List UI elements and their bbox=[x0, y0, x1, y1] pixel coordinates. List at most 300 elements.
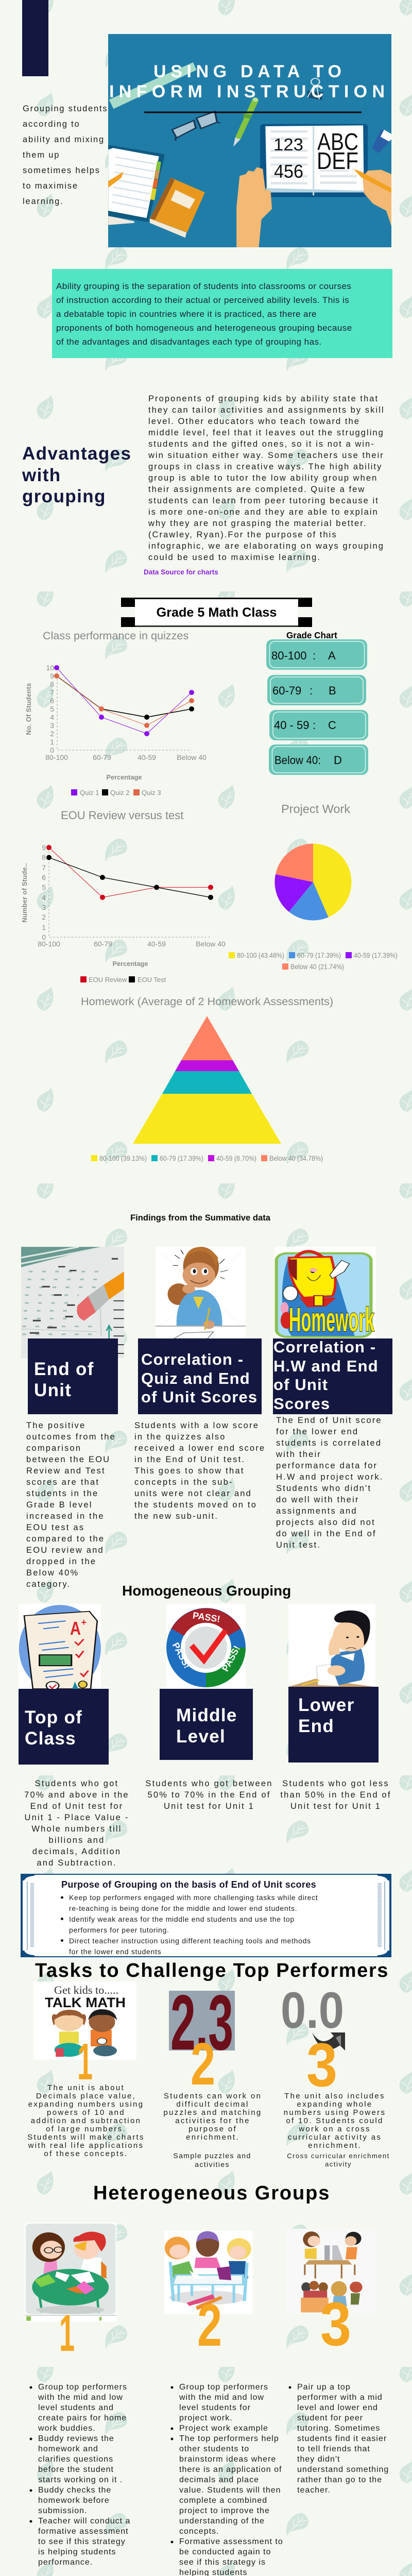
advantages paragraph: is more one-on-one and they are able to explain bbox=[148, 507, 379, 517]
finding text: End of Unit: dropped in the bbox=[26, 1557, 96, 1566]
level text: top of class bbox=[24, 1779, 129, 1868]
advantages paragraph: why they are not grasping the material better. bbox=[148, 519, 367, 528]
grade chart: Below 40: bbox=[274, 754, 321, 767]
strategy list 3: performer with a mid bbox=[297, 2393, 383, 2402]
bullet dots bbox=[61, 1896, 63, 1942]
grade chart: A bbox=[328, 649, 336, 662]
purpose heading: Purpose of Grouping on the basis of End of Unit scores bbox=[61, 1879, 316, 1890]
level box: Top of Class: Class bbox=[25, 1728, 76, 1749]
strategy list 2: project to improve the bbox=[179, 2506, 270, 2515]
image: pass badge: PASS! bbox=[170, 1641, 193, 1670]
line chart: EOU review versus test: 7 bbox=[42, 863, 46, 872]
strategy list 3: level and lower end bbox=[297, 2403, 378, 2412]
strategy list 3: tutoring. Sometimes bbox=[297, 2424, 380, 2433]
advantages paragraph bbox=[148, 394, 385, 562]
finding text: homework correlation: H.W and project work. bbox=[276, 1472, 384, 1482]
advantages paragraph: Proponents of grouping kids by ability state that bbox=[148, 394, 379, 403]
data source link: Data Source for charts bbox=[144, 568, 218, 576]
strategy list 2: brainstorm ideas where bbox=[179, 2455, 276, 2464]
level text: middle level: 50% to 70% in the End of bbox=[147, 1790, 271, 1800]
line chart: EOU review versus test: 5 bbox=[42, 883, 46, 891]
line chart: class performance in quizzes: No. Of Students bbox=[25, 683, 32, 735]
line chart: class performance in quizzes: Below 40 bbox=[177, 753, 207, 761]
line chart: class performance in quizzes: 8 bbox=[50, 680, 54, 688]
finding text: homework correlation: assignments and bbox=[276, 1506, 357, 1516]
strategy list 3: they didn't bbox=[297, 2455, 340, 2464]
task link 3 bbox=[287, 2152, 390, 2168]
line chart: class performance in quizzes: 7 bbox=[50, 688, 54, 697]
title box: End of Unit: Unit bbox=[34, 1380, 72, 1400]
task text 1: Students will make charts bbox=[27, 2133, 145, 2142]
level text: top of class: Whole numbers till bbox=[31, 1824, 122, 1834]
legend bbox=[91, 1155, 323, 1162]
image: pair at green table bbox=[25, 2223, 116, 2322]
task text 3: of 10. Students could bbox=[286, 2116, 384, 2125]
line chart: class performance in quizzes: 9 bbox=[50, 672, 54, 680]
finding text: End of Unit: compared to the bbox=[26, 1534, 105, 1544]
purpose bullets bbox=[69, 1893, 318, 1956]
image: talk math kids: TALK MATH bbox=[45, 1995, 126, 2010]
grade chart: 80-100 bbox=[271, 649, 307, 662]
purpose bullets: performers for peer tutoring. bbox=[69, 1926, 169, 1934]
purpose bullets: Identify weak areas for the middle end students and use the top bbox=[69, 1914, 295, 1923]
task text 2 bbox=[163, 2092, 262, 2142]
finding text: End of Unit: comparison bbox=[26, 1444, 81, 1453]
legend: EOU Review bbox=[89, 976, 127, 984]
legend: 60-79 (17.39%) bbox=[297, 952, 341, 959]
line chart: class performance in quizzes: 5 bbox=[50, 705, 54, 713]
task text 3 bbox=[284, 2092, 386, 2150]
grade chart: C bbox=[328, 719, 336, 732]
list 1 bullets bbox=[29, 2385, 33, 2524]
strategy list 1: homework and bbox=[38, 2445, 98, 2453]
series: quiz 1 bbox=[54, 665, 194, 736]
grade chart: D bbox=[334, 754, 342, 767]
level text: top of class: and Subtraction. bbox=[37, 1858, 117, 1868]
finding text: End of Unit: increased in the bbox=[26, 1512, 105, 1521]
heading: advantages with grouping: with bbox=[22, 465, 61, 485]
finding text: homework correlation: Students who didn't bbox=[276, 1484, 371, 1493]
image: pass badge bbox=[166, 1604, 246, 1689]
line chart: class performance in quizzes: 2 bbox=[50, 730, 54, 738]
task link 3: Cross curricular enrichment bbox=[287, 2152, 390, 2160]
image: confused man bbox=[288, 1604, 375, 1687]
title: INFORM INSTRUCTION bbox=[109, 82, 385, 101]
line chart: EOU review versus test: 1 bbox=[42, 923, 46, 931]
level text: top of class: Unit 1 - Place Value - bbox=[24, 1813, 129, 1822]
strategy list 1: to see if this strategy bbox=[38, 2537, 126, 2546]
line chart: EOU review versus test bbox=[21, 809, 226, 984]
strategy list 3: student for peer bbox=[297, 2414, 363, 2422]
level text: top of class: billions and bbox=[49, 1836, 105, 1845]
image: thinking girl bbox=[156, 1247, 246, 1338]
grade chart: B bbox=[329, 684, 336, 697]
title box: Correlation quiz bbox=[138, 1338, 262, 1414]
strategy list 1: Buddy checks the bbox=[38, 2486, 111, 2495]
banner: Grade 5 Math Class: Grade 5 Math Class bbox=[157, 605, 277, 620]
strategy list 3: understand something bbox=[297, 2465, 389, 2474]
intro text: to maximise bbox=[23, 181, 78, 191]
finding text: quiz correlation: in the End of Unit test. bbox=[134, 1455, 245, 1464]
grade chart: : bbox=[313, 649, 316, 662]
navy accent bar bbox=[22, 0, 48, 76]
strategy list 1: level students and bbox=[38, 2403, 114, 2412]
finding text: End of Unit: Below 40% bbox=[26, 1568, 79, 1578]
level text: lower end bbox=[280, 1779, 391, 1811]
finding text: quiz correlation: concepts in the sub- bbox=[134, 1478, 233, 1487]
line chart: EOU review versus test: 3 bbox=[42, 903, 46, 911]
level text: lower end: Students who got less bbox=[282, 1779, 389, 1788]
grade chart title: Grade Chart bbox=[286, 631, 337, 640]
task text 1: of large numbers. bbox=[46, 2125, 126, 2133]
strategy list 1: Teacher will conduct a bbox=[38, 2517, 130, 2526]
strategy list 2: Project work example bbox=[179, 2424, 268, 2433]
strategy list 2: understanding of the bbox=[179, 2517, 265, 2526]
line chart: class performance in quizzes: 4 bbox=[50, 713, 54, 721]
advantages paragraph: groups in class in creative ways. The high ability bbox=[148, 462, 382, 471]
chart title: EOU Review versus test bbox=[61, 809, 183, 822]
task text 2: Students can work on bbox=[164, 2092, 262, 2100]
series: quiz 2 bbox=[57, 676, 194, 720]
finding text: quiz correlation: received a lower end score bbox=[134, 1444, 265, 1453]
level box: Lower End: End bbox=[298, 1716, 334, 1736]
image: students at desks bbox=[286, 2229, 363, 2312]
strategy list 2: there is an application of bbox=[179, 2465, 282, 2474]
task text 1: addition and subtraction bbox=[31, 2116, 141, 2125]
image: pass badge: PASS! bbox=[220, 1644, 242, 1673]
title box: Correlation quiz: Correlation - bbox=[141, 1350, 244, 1368]
definition text: of the advantages and disadvantages each type of grouping has. bbox=[56, 337, 322, 346]
task text 1 bbox=[27, 2083, 145, 2158]
image: A+ test paper: A bbox=[70, 1618, 81, 1639]
finding text: End of Unit: EOU test as bbox=[26, 1523, 84, 1532]
task text 3: expanding whole bbox=[297, 2100, 373, 2109]
line chart: class performance in quizzes: 1 bbox=[50, 738, 54, 746]
legend: Quiz 1 bbox=[80, 789, 99, 796]
level text: middle level bbox=[145, 1779, 273, 1811]
intro text: them up bbox=[23, 150, 60, 160]
task text 1: powers of 10 and bbox=[47, 2108, 125, 2117]
purpose bullets: for the lower end students bbox=[69, 1947, 161, 1956]
pyramid chart: homework bbox=[81, 995, 333, 1162]
task text 3: The unit also includes bbox=[284, 2092, 385, 2100]
finding text: homework correlation bbox=[276, 1416, 384, 1550]
title box: Correlation homework: Correlation - bbox=[273, 1338, 376, 1356]
image: A+ test paper bbox=[19, 1604, 101, 1689]
legend: Below 40 (21.74%) bbox=[290, 963, 344, 971]
definition text: of instruction according to their actual or perceived ability levels. This is bbox=[56, 295, 349, 305]
finding text: homework correlation: do well in the End of bbox=[276, 1529, 376, 1538]
line chart: EOU review versus test: 40-59 bbox=[147, 940, 166, 948]
finding text: homework correlation: students is correlated bbox=[276, 1438, 382, 1448]
level box: Lower End bbox=[288, 1687, 379, 1762]
image: pass badge: PASS! bbox=[192, 1610, 221, 1624]
finding text: End of Unit bbox=[26, 1421, 116, 1589]
strategy list 3: rather than go to the bbox=[297, 2476, 382, 2484]
task text 1: expanding numbers using bbox=[28, 2100, 144, 2109]
title box: Correlation homework bbox=[273, 1338, 392, 1414]
title bbox=[109, 62, 385, 101]
chart title: Homework (Average of 2 Homework Assessments) bbox=[81, 995, 333, 1008]
finding text: quiz correlation: This goes to show that bbox=[134, 1466, 244, 1476]
definition text: a debatable topic in countries where it is practiced, as there are bbox=[56, 309, 317, 318]
task text 3: enrichment. bbox=[308, 2141, 362, 2150]
teal definition panel bbox=[52, 269, 392, 358]
purpose bullets: Keep top performers engaged with more challenging tasks while direct bbox=[69, 1893, 318, 1901]
finding text: homework correlation: projects also did not bbox=[276, 1518, 375, 1527]
legend bbox=[229, 952, 398, 971]
strategy list 2: Group top performers bbox=[179, 2383, 268, 2392]
strategy list 1: performance. bbox=[38, 2558, 93, 2567]
line chart: EOU review versus test: 8 bbox=[42, 853, 46, 861]
task text 3: numbers using Powers bbox=[284, 2108, 386, 2117]
series: quiz 3 bbox=[54, 673, 194, 728]
legend: 40-59 (8.70%) bbox=[216, 1155, 256, 1162]
line chart: EOU review versus test: 6 bbox=[42, 873, 46, 882]
line chart: class performance in quizzes: 80-100 bbox=[45, 753, 68, 761]
strategy list 3: to tell friends that bbox=[297, 2445, 370, 2453]
task text 1: Decimals place value, bbox=[36, 2092, 136, 2100]
title: USING DATA TO bbox=[153, 62, 341, 81]
hero illustration with title: 456 bbox=[274, 161, 303, 182]
title box: Correlation homework: of Unit bbox=[273, 1376, 328, 1394]
level text: lower end: Unit test for Unit 1 bbox=[290, 1802, 381, 1811]
title box: End of Unit bbox=[28, 1338, 118, 1414]
finding text: End of Unit: The positive bbox=[26, 1421, 85, 1430]
task text 2: enrichment. bbox=[186, 2133, 239, 2142]
title box: Correlation homework: H.W and End bbox=[273, 1357, 379, 1375]
line chart: EOU review versus test: Below 40 bbox=[196, 940, 226, 948]
strategy list 2: complete a combined bbox=[179, 2496, 267, 2505]
strategy list 2: project work. bbox=[179, 2414, 233, 2422]
task text 1: with real life applications bbox=[28, 2141, 144, 2150]
legend bbox=[71, 789, 161, 796]
finding text: End of Unit: EOU review and bbox=[26, 1546, 104, 1555]
strategy list 1: formative assessment bbox=[38, 2527, 129, 2536]
line chart: EOU review versus test: 60-79 bbox=[94, 940, 112, 948]
line chart: class performance in quizzes bbox=[25, 629, 207, 796]
image: answer sheet and pencil bbox=[21, 1247, 124, 1358]
advantages paragraph: win situation either way. Some teachers use their bbox=[148, 451, 384, 460]
image: talk math kids: Get kids to..... bbox=[54, 1984, 118, 1996]
line chart: class performance in quizzes: 60-79 bbox=[93, 753, 111, 761]
heading: heterogeneous groups: Heterogeneous Groups bbox=[93, 2182, 330, 2204]
finding text: End of Unit: Grade B level bbox=[26, 1500, 93, 1510]
finding text: End of Unit: scores are that bbox=[26, 1478, 99, 1487]
finding text: End of Unit: between the EOU bbox=[26, 1455, 110, 1464]
finding text: End of Unit: students in the bbox=[26, 1489, 98, 1498]
strategy list 1 bbox=[38, 2382, 130, 2568]
legend: 40-59 (17.39%) bbox=[354, 952, 398, 959]
line chart: class performance in quizzes: 0 bbox=[50, 746, 54, 754]
image: A+ test paper: + bbox=[81, 1617, 87, 1628]
task link 2 bbox=[173, 2151, 251, 2168]
level text: top of class: End of Unit test for bbox=[30, 1802, 123, 1811]
title box: Correlation quiz: Quiz and End bbox=[141, 1369, 250, 1387]
task text 2: difficult decimal bbox=[176, 2100, 249, 2109]
series: EOU test bbox=[46, 855, 213, 900]
finding text: homework correlation: Unit test. bbox=[276, 1540, 321, 1550]
legend: Quiz 2 bbox=[110, 789, 130, 796]
legend: EOU Test bbox=[138, 976, 166, 984]
task text 2: activities for the bbox=[175, 2116, 250, 2125]
finding text: quiz correlation: Students with a low score bbox=[134, 1421, 259, 1430]
strategy list 2: Formative assessment to bbox=[179, 2537, 283, 2546]
level box: Lower End: Lower bbox=[298, 1695, 355, 1715]
task text 3: work on a cross bbox=[299, 2125, 371, 2133]
advantages paragraph: students can learn from peer tutoring because it bbox=[148, 496, 379, 505]
intro text: sometimes helps bbox=[23, 166, 100, 175]
line chart: class performance in quizzes: 40-59 bbox=[138, 753, 156, 761]
legend: Below 40 (34.78%) bbox=[269, 1155, 323, 1162]
definition text: proponents of both homogeneous and heterogeneous grouping because bbox=[56, 323, 352, 333]
strategy list 2: be conducted again to bbox=[179, 2548, 271, 2556]
strategy list 3: students find it easier bbox=[297, 2434, 387, 2443]
image: three kids at blue table bbox=[164, 2231, 253, 2314]
strategy list 2: The top performers help bbox=[179, 2434, 279, 2443]
level text: lower end: than 50% in the End of bbox=[280, 1790, 391, 1800]
advantages paragraph: group is able to tutor the low ability group when bbox=[148, 473, 377, 483]
finding text: End of Unit: category. bbox=[26, 1580, 71, 1589]
line chart: EOU review versus test: Number of Stude.. bbox=[21, 863, 28, 923]
finding text: quiz correlation: the new sub-unit. bbox=[134, 1512, 218, 1521]
intro text: learning. bbox=[23, 197, 64, 206]
task text 1: The unit is about bbox=[47, 2083, 125, 2092]
finding text: homework correlation: for the lower end bbox=[276, 1427, 358, 1436]
level text: top of class: decimals, Addition bbox=[32, 1847, 121, 1856]
framed panel: purpose of grouping bbox=[21, 1874, 391, 1957]
legend bbox=[80, 976, 166, 984]
intro text: Grouping students bbox=[23, 104, 108, 113]
series: EOU review bbox=[46, 845, 213, 900]
purpose bullets: Direct teacher instruction using different teaching tools and methods bbox=[69, 1936, 311, 1944]
advantages paragraph: middle level, feel that it leaves out the struggling bbox=[148, 428, 384, 437]
level box: Top of Class: Top of bbox=[25, 1707, 82, 1727]
strategy list 3: Pair up a top bbox=[297, 2383, 351, 2392]
line chart: EOU review versus test: 4 bbox=[42, 893, 46, 902]
line chart: class performance in quizzes: Percentage bbox=[106, 773, 142, 781]
task text 1: of these concepts. bbox=[44, 2149, 128, 2158]
advantages paragraph: they can tailor activities and assignments by skill bbox=[148, 405, 385, 415]
strategy list 1: is helping students bbox=[38, 2548, 116, 2556]
hero illustration with title: 123 bbox=[273, 135, 303, 154]
level text: middle level: Unit test for Unit 1 bbox=[164, 1802, 254, 1811]
advantages paragraph: their assignments are completed. Quite a few bbox=[148, 485, 365, 494]
strategy list 1: create pairs for home bbox=[38, 2414, 127, 2422]
heading: homogeneous grouping: Homogeneous Grouping bbox=[122, 1583, 291, 1599]
strategy list 1: Buddy reviews the bbox=[38, 2434, 114, 2443]
chart title: Project Work bbox=[281, 802, 350, 816]
title box: Correlation homework: Scores bbox=[273, 1394, 330, 1413]
finding text: quiz correlation: the students moved on to bbox=[134, 1500, 257, 1510]
advantages paragraph: infographic, we are elaborating on ways grouping bbox=[148, 541, 384, 551]
heading: advantages with grouping: Advantages bbox=[22, 444, 131, 464]
definition text: Ability grouping is the separation of students into classrooms or courses bbox=[56, 281, 351, 291]
image: homework backpack bbox=[274, 1247, 376, 1338]
title box: Correlation quiz: of Unit Scores bbox=[141, 1388, 258, 1406]
heading: findings: Findings from the Summative data bbox=[130, 1213, 270, 1223]
heading: advantages with grouping: grouping bbox=[22, 486, 106, 506]
task text 2: puzzles and matching bbox=[163, 2108, 262, 2117]
banner: Grade 5 Math Class bbox=[121, 598, 312, 627]
level text: top of class: 70% and above in the bbox=[24, 1790, 129, 1800]
strategy list 2: decimals and place bbox=[179, 2476, 259, 2484]
finding text: homework correlation: The End of Unit score bbox=[276, 1416, 382, 1425]
line chart: EOU review versus test: 9 bbox=[42, 843, 46, 852]
definition text bbox=[56, 281, 352, 346]
image: talk math kids bbox=[33, 1981, 136, 2060]
line chart: EOU review versus test: 2 bbox=[42, 913, 46, 921]
level text: top of class: Students who got bbox=[35, 1779, 118, 1788]
finding text: End of Unit: Review and Test bbox=[26, 1466, 106, 1476]
line chart: EOU review versus test: 80-100 bbox=[38, 940, 60, 948]
advantages paragraph: (Crawley, Ryan).For the purpose of this bbox=[148, 530, 337, 539]
strategy list 1: submission. bbox=[38, 2506, 87, 2515]
strategy list 1: Group top performers bbox=[38, 2383, 127, 2392]
legend: 80-100 (39.13%) bbox=[99, 1155, 147, 1162]
finding text: quiz correlation: units were not clear and bbox=[134, 1489, 252, 1498]
strategy list 2 bbox=[179, 2382, 283, 2576]
finding text: quiz correlation: in the quizzes also bbox=[134, 1432, 226, 1442]
finding text: homework correlation: performance data for bbox=[276, 1461, 377, 1470]
grade chart: : bbox=[313, 719, 316, 732]
hero illustration with title: DEF bbox=[317, 147, 358, 174]
grade chart: 60-79 bbox=[272, 684, 301, 697]
strategy list 1: work buddies. bbox=[38, 2424, 96, 2433]
advantages paragraph: level. Other educators who teach toward the bbox=[148, 417, 360, 426]
legend: 60-79 (17.39%) bbox=[160, 1155, 203, 1162]
advantages paragraph: students and the gifted ones, so it is not a win- bbox=[148, 439, 375, 449]
purpose bullets: re-teaching is being done for the middle and lower end students. bbox=[69, 1904, 297, 1912]
strategy list 2: with the mid and low bbox=[179, 2393, 264, 2402]
grade chart bbox=[266, 631, 368, 775]
level box: Middle Level: Level bbox=[176, 1726, 226, 1747]
finding text: quiz correlation bbox=[134, 1421, 265, 1521]
legend: Quiz 3 bbox=[142, 789, 161, 796]
heading: advantages with grouping bbox=[22, 444, 131, 506]
strategy list 1: clarifies questions bbox=[38, 2455, 113, 2464]
strategy list 1: starts working on it . bbox=[38, 2476, 123, 2484]
finding text: homework correlation: do well with their bbox=[276, 1495, 359, 1504]
strategy list 1: homework before bbox=[38, 2496, 110, 2505]
list 2 bullets bbox=[170, 2385, 174, 2545]
line chart: EOU review versus test: Percentage bbox=[112, 960, 148, 968]
strategy list 1: with the mid and low bbox=[38, 2393, 123, 2402]
line chart: class performance in quizzes: 6 bbox=[50, 697, 54, 705]
level box: Middle Level: Middle bbox=[176, 1705, 237, 1725]
strategy list 2: other students to bbox=[179, 2445, 249, 2453]
hero illustration with title: ABC bbox=[317, 128, 358, 155]
strategy list 2: value. Students will then bbox=[179, 2486, 281, 2495]
title box: End of Unit: End of bbox=[34, 1359, 94, 1379]
strategy list 2: see if this strategy is bbox=[179, 2558, 266, 2567]
task text 2: purpose of bbox=[188, 2125, 237, 2133]
line chart: class performance in quizzes: 10 bbox=[46, 664, 54, 672]
finding text: End of Unit: outcomes from the bbox=[26, 1432, 116, 1442]
advantages paragraph: could be used to maximise learning. bbox=[148, 553, 321, 562]
task link 2: activities bbox=[195, 2160, 230, 2168]
strategy list 1: before the student bbox=[38, 2465, 114, 2474]
intro text: according to bbox=[23, 120, 80, 129]
heading: tasks to challenge top performers: Tasks to Challenge Top Performers bbox=[35, 1960, 389, 1981]
pie chart: project work bbox=[229, 802, 398, 971]
intro text bbox=[23, 104, 108, 206]
level box: Middle Level bbox=[160, 1689, 253, 1760]
grade chart: 40 - 59 bbox=[274, 719, 309, 732]
list 3 bullet bbox=[288, 2385, 292, 2389]
intro text: ability and mixing bbox=[23, 135, 105, 144]
strategy list 3: teacher. bbox=[297, 2486, 331, 2495]
